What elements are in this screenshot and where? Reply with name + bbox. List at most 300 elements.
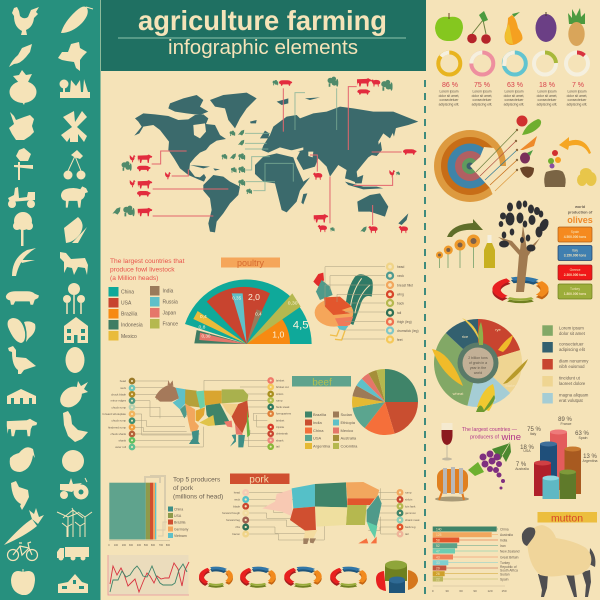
beef cut labels left: hindered rump: [108, 425, 126, 429]
icon: barn: [7, 389, 36, 404]
pork cut labels right: gammon: [405, 511, 416, 515]
pork cut labels left: ribs: [235, 525, 241, 529]
icon: pear: [505, 12, 522, 45]
chart: pork producers stacked bar: 500: [144, 544, 149, 547]
chart: country bars: 52: [436, 544, 440, 548]
banner: pork: pork: [249, 474, 270, 486]
icon: tree: [13, 212, 33, 246]
subtitle: infographic elements: [168, 36, 358, 59]
olive producers boxes: [558, 227, 592, 299]
wine percentage labels: Spain: [579, 436, 588, 440]
legend: poultry countries: [108, 286, 178, 340]
chart: poultry fan: 0,35: [232, 295, 242, 300]
chart: poultry fan: 0,4: [200, 314, 207, 320]
box: Greece: Greece: [570, 268, 581, 272]
donut: 75 percent: [471, 52, 493, 74]
legend: beef countries: Ethiopia: [340, 420, 356, 425]
rooster cut labels: tail: [397, 311, 401, 315]
rooster cut labels: drumstick (leg): [397, 329, 419, 333]
icon: oil bottle: [484, 235, 495, 268]
rooster cut labels: feet: [397, 338, 403, 342]
beef cut rings right: [268, 378, 273, 449]
legend: grain: consectetuer: [559, 342, 584, 346]
pork cut labels right: shank meat: [405, 518, 420, 522]
icons: vegetables: [516, 116, 541, 178]
dashed column divider: [424, 80, 426, 600]
icon: tractor: [60, 478, 88, 500]
pork cut labels right: rump: [405, 490, 412, 494]
box: Greece: 2.300.000 tons: [564, 273, 586, 277]
icon: turnip: [10, 70, 36, 105]
continents: [134, 93, 418, 232]
legend: grain: adipiscing elit: [559, 347, 586, 352]
pork cut rings right: [398, 490, 402, 536]
rooster cut labels: wing: [397, 292, 404, 296]
pork cut labels left: forward leg: [226, 518, 240, 522]
legend: beef countries: Sudan: [340, 412, 352, 417]
box: Greece: [558, 265, 592, 280]
chart: pork producers stacked bar: 0: [108, 544, 110, 547]
text block: world production of olives: production of: [568, 210, 593, 214]
legend: grain: tincidunt ut: [559, 376, 581, 380]
icon: horse: [60, 252, 88, 275]
chart: country bars: [432, 526, 520, 593]
lorem text columns: dolor sit amet,: [537, 94, 557, 98]
lorem text columns: consectetuer: [568, 98, 587, 102]
illustration: olive tree: [498, 200, 550, 292]
banner: beef: beef: [312, 378, 332, 388]
legend: beef countries: India: [313, 420, 322, 425]
box: Italy: 3.150.000 tons: [564, 254, 586, 258]
chart: pork producers stacked bar: 200: [122, 544, 127, 547]
rooster cut labels: [397, 265, 419, 342]
banner: mutton: [538, 512, 597, 524]
chart: pork producers stacked bar: [108, 476, 171, 547]
text block: wine producers heading: The largest countries —: [462, 427, 518, 433]
chart: pork producers stacked bar: 300: [129, 544, 134, 547]
icon: barrel: [435, 467, 469, 502]
legend: poultry countries: France: [162, 322, 178, 328]
chart: poultry fan: 0,4: [255, 312, 262, 317]
icon: country house: [58, 574, 88, 593]
donut: 86 percent: [438, 52, 460, 74]
beef cut labels right: brisket: [276, 418, 284, 422]
legend: pork countries: China: [174, 508, 183, 512]
lorem text columns: dolor sit amet,: [472, 94, 492, 98]
chart: poultry fan: 0,8: [199, 324, 206, 330]
beef cut labels left: forward wholeplate: [103, 412, 126, 416]
lorem text columns: Lorem ipsum: [504, 90, 524, 94]
chart: grain wheel: barley: [506, 383, 516, 388]
lorem text columns: dolor sit amet,: [439, 94, 459, 98]
chart: country bars: 0: [432, 589, 434, 593]
icon: pineapple: [568, 8, 585, 46]
text block: wine producers heading: wine: [500, 432, 521, 443]
pork cut labels left: forward hough: [222, 511, 240, 515]
legend: beef countries: Mexico: [340, 428, 354, 433]
box: Spain: [558, 227, 592, 242]
legend: pork countries: Brazilia: [174, 520, 186, 524]
panel: left icon sidebar: [0, 0, 100, 600]
chart: country bars: 120: [487, 589, 493, 593]
wine percentage labels: 13 %: [583, 454, 597, 460]
chart: line chart: [108, 555, 189, 595]
beef cut labels left: chuck rump: [112, 419, 126, 423]
cylinder: France: [550, 430, 567, 490]
legend: poultry countries: Brazilia: [121, 312, 138, 318]
icon: orange: [62, 450, 84, 472]
rooster cut labels: neck: [397, 274, 404, 278]
icon: grape leaf: [58, 42, 87, 71]
chart: tree base ring: [496, 278, 545, 302]
connector lines: [152, 87, 402, 225]
3D ring 1: [201, 568, 231, 587]
chart: grain wheel: world: [474, 371, 482, 375]
text block: world production of olives: olives: [567, 215, 593, 225]
pork cut labels right: [405, 490, 420, 536]
chart: country bars: South Africa: [500, 568, 518, 572]
legend: poultry countries: Indonesia: [121, 322, 143, 328]
beef cut labels right: tripsite: [276, 425, 285, 429]
arrow: curved yellow: [559, 137, 591, 154]
wine percentage labels: 89 %: [558, 417, 572, 423]
pork cut labels left: bacon: [232, 532, 240, 536]
pork cut rings left: [243, 490, 248, 536]
title: agriculture farming: [138, 5, 387, 36]
pork cut labels right: back leg: [405, 525, 416, 529]
chart: pork producers stacked bar: 700: [159, 544, 164, 547]
icon: sheep: [61, 186, 88, 208]
beef cut labels right: chinsteak: [276, 432, 288, 436]
chart: grain wheel: wheat: [453, 391, 464, 396]
wine percentage labels: Italy: [530, 432, 536, 436]
legend: grain: magna aliquam: [559, 392, 589, 398]
icon: duck: [63, 411, 88, 442]
text block: fowl livestock heading: The largest countries that: [110, 258, 185, 265]
chart: country bars: 140: [436, 528, 442, 532]
pork cut labels left: neck: [234, 498, 241, 502]
box: Spain: Spain: [571, 230, 579, 234]
legend: pork countries: [168, 506, 189, 538]
beef cut labels right: brisket cut: [276, 385, 289, 389]
text block: wine producers heading: [462, 427, 521, 443]
chart: country bars: 47: [436, 550, 440, 554]
icon: goose: [8, 346, 36, 374]
percent labels: 7 %: [572, 82, 584, 89]
chart: country bars: Turkey: [500, 561, 510, 565]
pork cut labels right: tail: [405, 532, 409, 536]
lorem text columns: adipiscing elit.: [439, 102, 459, 106]
chart: country bars: 43: [436, 556, 440, 560]
3D ring 3: [287, 568, 319, 587]
icon: sunflowers: [436, 234, 480, 268]
chart: country bars: 29: [436, 566, 440, 570]
donut: 18 percent: [534, 52, 556, 74]
chart: grain wheel: [434, 319, 522, 407]
legend: pork countries: Vietnam: [174, 534, 187, 538]
chart: country bars: New Zealand: [500, 550, 520, 554]
lorem text columns: dolor sit amet,: [567, 94, 587, 98]
beef cut labels right: flank steak: [276, 405, 290, 409]
lorem text columns: Lorem ipsum: [567, 90, 587, 94]
charts: 3D segmented rings: [201, 568, 364, 587]
rooster cut labels: breast fillet: [397, 283, 413, 287]
legend: beef countries: Brazilia: [313, 412, 327, 417]
beef cut labels left: outer roll: [115, 445, 126, 449]
box: Turkey: 1.800.000 tons: [564, 292, 586, 296]
legend: poultry countries: Mexico: [121, 334, 137, 340]
text block: fowl livestock heading: (a Million heads): [110, 275, 158, 282]
pork cut labels left: blade: [233, 504, 240, 508]
rooster cut labels: head: [397, 265, 405, 269]
beef cut labels right: shank: [276, 438, 284, 442]
legend: beef countries: China: [313, 428, 324, 433]
wine percentage labels: 18 %: [520, 445, 534, 451]
chart: country bars: 125: [436, 533, 442, 537]
text block: wine producers heading: producers of: [470, 434, 500, 440]
percent labels: 18 %: [539, 82, 555, 89]
icon: wind turbines: [57, 508, 92, 537]
banner: beef: [292, 376, 351, 388]
pork cut labels left: head: [234, 490, 240, 494]
wine percentage labels: France: [561, 422, 571, 426]
chart: grain wheel: rye: [495, 327, 502, 332]
banner: poultry: [221, 258, 280, 268]
chart: grain wheel: 2 billion tons: [468, 356, 488, 360]
beef cut labels right: tail: [276, 445, 280, 449]
icon: scooter: [8, 187, 35, 208]
panel: title header: [101, 0, 426, 71]
percent labels: 86 %: [442, 82, 458, 89]
rooster cut labels: back: [397, 301, 404, 305]
chart: pork producers stacked bar: 800: [166, 544, 171, 547]
legend: beef countries: [305, 412, 358, 449]
red livestock icons: [130, 78, 417, 233]
icon: wine glass: [442, 423, 452, 460]
illustration: sheep: [522, 525, 595, 597]
legend: poultry countries: Japan: [162, 310, 176, 316]
chart: beef pie: [352, 369, 418, 435]
chart: grain wheel: year in the: [470, 366, 486, 370]
legend: grain: nibh euismod: [559, 364, 585, 369]
chart: country bars: 26: [436, 572, 440, 576]
beef cut labels left: shank: [119, 438, 127, 442]
legend: grain: laoreet dolore: [559, 381, 586, 386]
wine percentage labels: USA: [523, 449, 531, 453]
wine percentage labels: Argentina: [583, 459, 598, 463]
legend: grain: diam nonummy: [559, 358, 589, 364]
banner: pork: [230, 474, 290, 486]
lorem text columns: consectetuer: [538, 98, 557, 102]
icon: garden: [60, 79, 90, 98]
text block: top 5 producers of pork: Top 5 producers: [173, 476, 221, 484]
beef cut labels right: brisket: [276, 378, 284, 382]
lorem text columns: consectetuer: [473, 98, 492, 102]
beef cut rings left: [130, 379, 134, 449]
panel: fruit percentages: [435, 8, 588, 106]
chart: country bars: China: [500, 528, 509, 532]
beef cut labels right: rump: [276, 398, 283, 402]
percent labels: [442, 82, 584, 89]
chart: country bars: 150: [501, 589, 507, 593]
icon: truck: [57, 547, 89, 560]
icon: apple: [435, 13, 463, 41]
chart: pork producers stacked bar: 100: [114, 544, 119, 547]
chart: poultry fan: [185, 280, 312, 344]
beef cut labels left: [103, 379, 127, 449]
beef cut labels left: neck: [120, 386, 127, 390]
icons: grain stalks: [432, 318, 528, 412]
icon: nuts: [8, 318, 35, 343]
legend: beef countries: USA: [313, 436, 322, 440]
illustration: pig cuts: [248, 482, 397, 544]
chart: country bars: Iran: [500, 544, 506, 548]
world map: [112, 77, 418, 233]
cylinder: Italy: [540, 442, 557, 494]
text block: top 5 producers of pork: (millions of head): [173, 494, 223, 500]
beef cut labels right: [276, 378, 292, 449]
icon: wheat: [9, 44, 32, 67]
icon: pineapple: [56, 381, 88, 412]
icon: apple: [11, 569, 35, 595]
icon: plum: [536, 12, 556, 42]
text block: top 5 producers of pork: [173, 476, 223, 500]
icon: pig: [6, 291, 39, 305]
box: Italy: [558, 246, 592, 260]
lorem text columns: adipiscing elit.: [504, 102, 524, 106]
lorem text columns: adipiscing elit.: [472, 102, 492, 106]
icon: grapes: [468, 442, 511, 490]
pork cut labels right: loin fank: [405, 504, 416, 508]
beef cut labels left: chuck rump: [112, 405, 126, 409]
chart: vegetable spiral rings: [434, 129, 520, 202]
green crop icons: [112, 77, 400, 232]
chart: country bars: 60: [459, 589, 463, 593]
3D ring 4: [333, 568, 364, 587]
wine percentage labels: Australia: [515, 467, 529, 471]
chart: country bars: Republic of: [500, 565, 517, 569]
legend: poultry countries: USA: [121, 300, 132, 306]
pork cut labels right: sirloin: [405, 498, 413, 502]
legend: grain: Lorem ipsum: [559, 326, 584, 330]
legend: grain: dolor sit amet: [559, 331, 586, 336]
wine percentage labels: 63 %: [575, 431, 589, 437]
chart: poultry fan: 0,30: [201, 333, 211, 338]
rooster cut labels: thigh (leg): [397, 320, 412, 324]
wine percentage labels: [515, 417, 598, 471]
legend: pork countries: Germany: [174, 528, 189, 532]
lorem text columns: consectetuer: [440, 98, 459, 102]
donut: 7 percent: [566, 52, 588, 74]
lorem text columns: adipiscing elit.: [567, 102, 587, 106]
icon: corn: [64, 217, 87, 243]
pork cut labels left: [222, 490, 241, 536]
lorem text columns: adipiscing elit.: [537, 102, 557, 106]
3D ring 2: [243, 568, 273, 587]
wine percentage labels: 7 %: [516, 462, 527, 468]
chart: country bars: Australia: [500, 533, 513, 537]
icon: windmill: [61, 111, 87, 142]
cylinder: Spain: [564, 446, 581, 494]
chart: country bars: India: [500, 538, 507, 542]
donut: 63 percent: [504, 52, 526, 74]
beef cut labels right: sirloin: [276, 392, 284, 396]
wine percentage labels: 75 %: [527, 427, 541, 433]
icon: bicycle: [8, 542, 38, 560]
icon: cherries: [467, 11, 491, 44]
icon: flower tree: [63, 283, 85, 314]
chart: country bars: Spain: [500, 578, 509, 582]
box: Italy: Italy: [572, 248, 578, 252]
icon: weathervane: [14, 148, 33, 180]
chart: country bars: 90: [473, 589, 477, 593]
chart: 3D cylinders ring: [376, 560, 418, 593]
text block: fowl livestock heading: produce fowl livestock: [110, 266, 175, 274]
cylinder: Argentina: [560, 470, 576, 499]
legend: grain: erat volutpat: [559, 398, 583, 403]
icon: house: [64, 317, 88, 343]
lorem text columns: Lorem ipsum: [537, 90, 557, 94]
chart: pork producers stacked bar: 400: [137, 544, 142, 547]
chart: grain wheel: of grain in a: [469, 361, 487, 365]
icon: hen: [11, 481, 29, 510]
lorem text columns: dolor sit amet,: [504, 94, 524, 98]
beef leader lines: [135, 380, 268, 447]
chart: poultry fan: 0,30: [288, 300, 298, 306]
rooster cut rings: [387, 264, 393, 342]
beef cut labels right: forequarters: [276, 412, 292, 416]
lorem text columns: consectetuer: [505, 98, 524, 102]
icon: cherries: [64, 150, 86, 180]
icon: pear: [10, 447, 35, 472]
chart: grain wheel: corn: [488, 397, 496, 402]
chart: country bars: Great Britain: [500, 556, 519, 560]
beef cut labels left: minor edges: [111, 399, 127, 403]
chart: country bars: 30: [445, 589, 449, 593]
chart: country bars: 58: [436, 538, 440, 542]
cylinder: Australia: [542, 476, 559, 499]
box: Turkey: [558, 284, 592, 299]
chart: grain wheel: rice: [462, 334, 469, 339]
box: Turkey: Turkey: [570, 287, 580, 291]
banner: poultry: poultry: [237, 258, 265, 268]
arrow: curved olive: [447, 219, 483, 237]
text block: fowl livestock heading: [110, 258, 185, 282]
lorem text columns: Lorem ipsum: [472, 90, 492, 94]
illustration: rooster: [313, 273, 373, 340]
beef cut labels left: chuck blade: [111, 392, 126, 396]
pork leader lines: [248, 488, 397, 540]
percent labels: 63 %: [507, 82, 523, 89]
icon: cucumber: [61, 7, 93, 33]
cylinder: USA: [534, 460, 551, 496]
chart: poultry fan: 4,5: [293, 320, 309, 332]
legend: poultry countries: Russia: [162, 300, 178, 306]
icon: cow: [7, 419, 37, 436]
icon: plum: [66, 347, 84, 373]
icon: rooster: [12, 7, 39, 35]
legend: pork countries: USA: [174, 514, 182, 518]
beef cut labels left: chuck shank: [110, 432, 127, 436]
text block: world production of olives: [567, 205, 593, 225]
chart: country bars: 33: [436, 561, 440, 565]
chart: poultry fan: 2,0: [248, 292, 260, 302]
title underline: [118, 38, 406, 39]
legend: beef countries: Colombia: [340, 444, 358, 448]
icon: turkey: [9, 112, 34, 140]
lorem text columns: [439, 90, 587, 106]
rooster leader lines: [325, 267, 385, 339]
